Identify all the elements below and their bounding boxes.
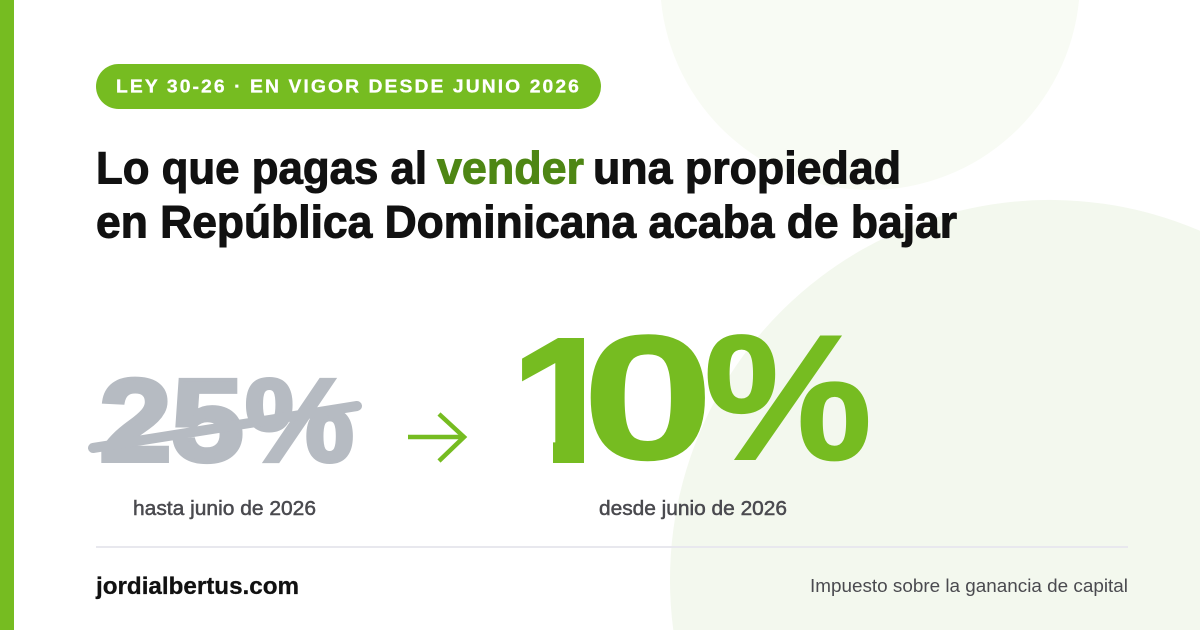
new rate: 10%: % — [704, 298, 872, 497]
arrow — [408, 414, 464, 461]
label: old rate: hasta junio de 2026 — [133, 498, 316, 520]
old rate: 25% struck through: % — [245, 355, 354, 487]
background circle: bottom — [670, 200, 1200, 630]
old rate: 25% struck through — [93, 355, 357, 487]
left accent bar — [0, 0, 14, 630]
label: new rate: desde junio de 2026 — [599, 498, 787, 520]
title: en República Dominicana acaba de bajar — [96, 196, 957, 248]
badge — [96, 64, 601, 109]
title: Lo que pagas al — [96, 142, 427, 194]
new rate: 10%: 0 — [582, 298, 714, 497]
title — [96, 142, 957, 248]
old rate: 25% struck through: 2 — [99, 355, 172, 487]
old rate: 25% struck through: 5 — [171, 355, 244, 487]
footer: topic: Impuesto sobre la ganancia de capital — [810, 575, 1128, 596]
title: una propiedad — [593, 142, 901, 194]
badge: LEY 30-26 · EN VIGOR DESDE JUNIO 2026 — [116, 76, 581, 96]
new rate: 10%: 1 — [510, 301, 622, 500]
footer: website: jordialbertus.com — [95, 573, 299, 600]
background circle: top — [661, 0, 1079, 190]
new rate: 10% — [522, 334, 868, 463]
title: vender — [437, 142, 584, 194]
